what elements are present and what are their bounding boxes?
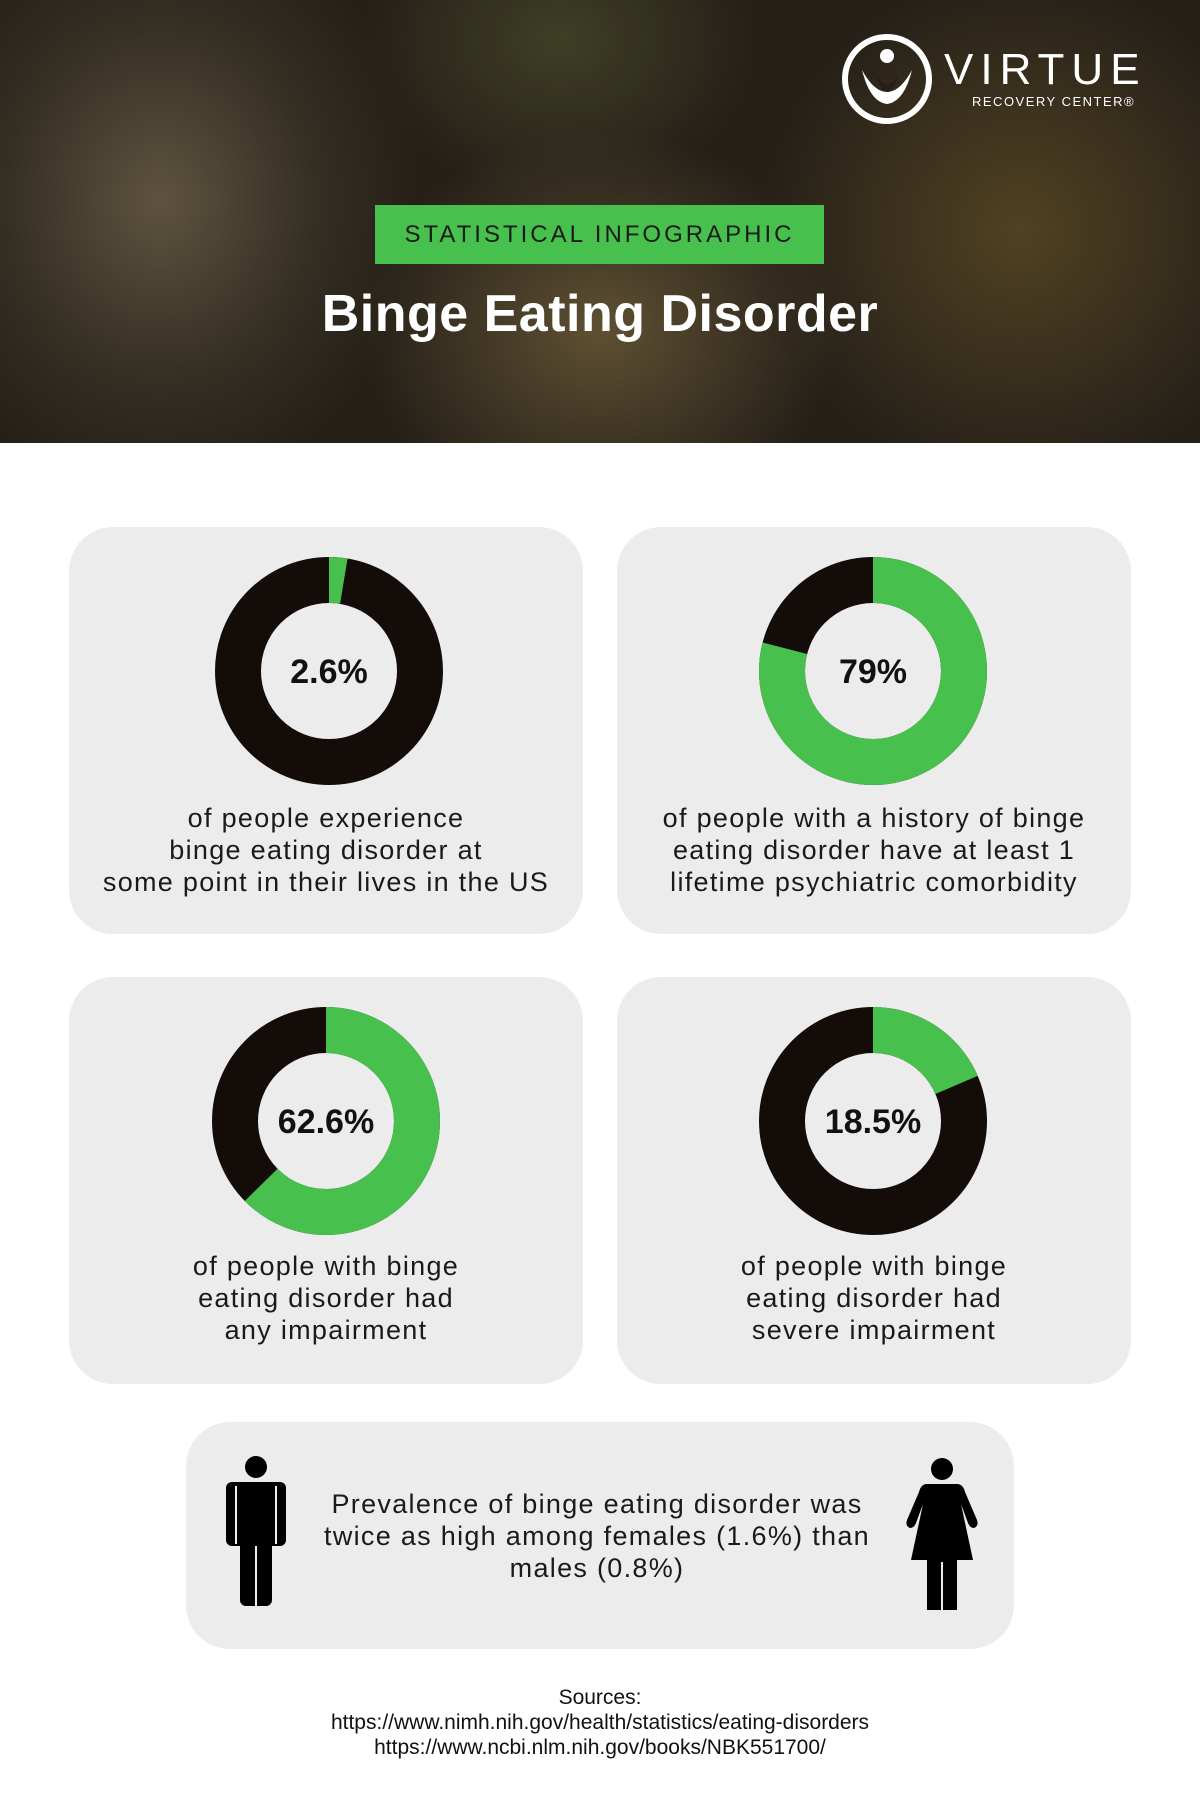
panel: 62.6% bbox=[69, 977, 583, 1384]
icon: logo circle bbox=[842, 34, 932, 124]
title: Binge Eating Disorder bbox=[322, 285, 878, 343]
logo bbox=[842, 34, 1147, 124]
sources: Sources: bbox=[559, 1686, 641, 1709]
text: some point in their lives in the US bbox=[103, 867, 549, 897]
text bbox=[663, 803, 1085, 897]
text: severe impairment bbox=[752, 1315, 996, 1345]
donut chart: 18.5% bbox=[825, 1103, 921, 1141]
panel: 2.6% bbox=[69, 527, 583, 934]
sources: https://www.ncbi.nlm.nih.gov/books/NBK551700/ bbox=[374, 1736, 826, 1759]
text bbox=[193, 1251, 459, 1345]
text bbox=[741, 1251, 1007, 1345]
badge bbox=[375, 205, 824, 264]
panel: 18.5% bbox=[617, 977, 1131, 1384]
logo text: VIRTUE bbox=[944, 45, 1147, 94]
badge: STATISTICAL INFOGRAPHIC bbox=[405, 221, 794, 248]
donut chart: 79% bbox=[839, 653, 907, 691]
icon: woman bbox=[906, 1458, 978, 1610]
panel: 79% bbox=[617, 527, 1131, 934]
donut chart: 2.6% bbox=[290, 653, 368, 691]
header background bbox=[0, 0, 1200, 443]
text bbox=[324, 1489, 870, 1583]
panel: gender prevalence bbox=[186, 1422, 1014, 1649]
text: twice as high among females (1.6%) than bbox=[324, 1521, 870, 1551]
donut chart bbox=[212, 1007, 440, 1235]
donut chart bbox=[215, 557, 443, 785]
donut chart bbox=[759, 557, 987, 785]
text bbox=[103, 803, 549, 897]
text: eating disorder had bbox=[198, 1283, 454, 1313]
icon: man bbox=[226, 1456, 286, 1606]
text: of people with binge bbox=[193, 1251, 459, 1281]
text: eating disorder had bbox=[746, 1283, 1002, 1313]
donut chart bbox=[759, 1007, 987, 1235]
donut chart: 62.6% bbox=[278, 1103, 374, 1141]
sources: https://www.nimh.nih.gov/health/statistics/eating-disorders bbox=[331, 1711, 869, 1734]
sources bbox=[331, 1686, 869, 1759]
text: eating disorder have at least 1 bbox=[673, 835, 1075, 865]
logo: RECOVERY CENTER® bbox=[972, 94, 1135, 109]
text: Prevalence of binge eating disorder was bbox=[332, 1489, 862, 1519]
text: of people with a history of binge bbox=[663, 803, 1085, 833]
text: of people with binge bbox=[741, 1251, 1007, 1281]
text: males (0.8%) bbox=[510, 1553, 684, 1583]
text: any impairment bbox=[225, 1315, 427, 1345]
text: of people experience bbox=[188, 803, 464, 833]
text: binge eating disorder at bbox=[169, 835, 483, 865]
text: lifetime psychiatric comorbidity bbox=[670, 867, 1078, 897]
